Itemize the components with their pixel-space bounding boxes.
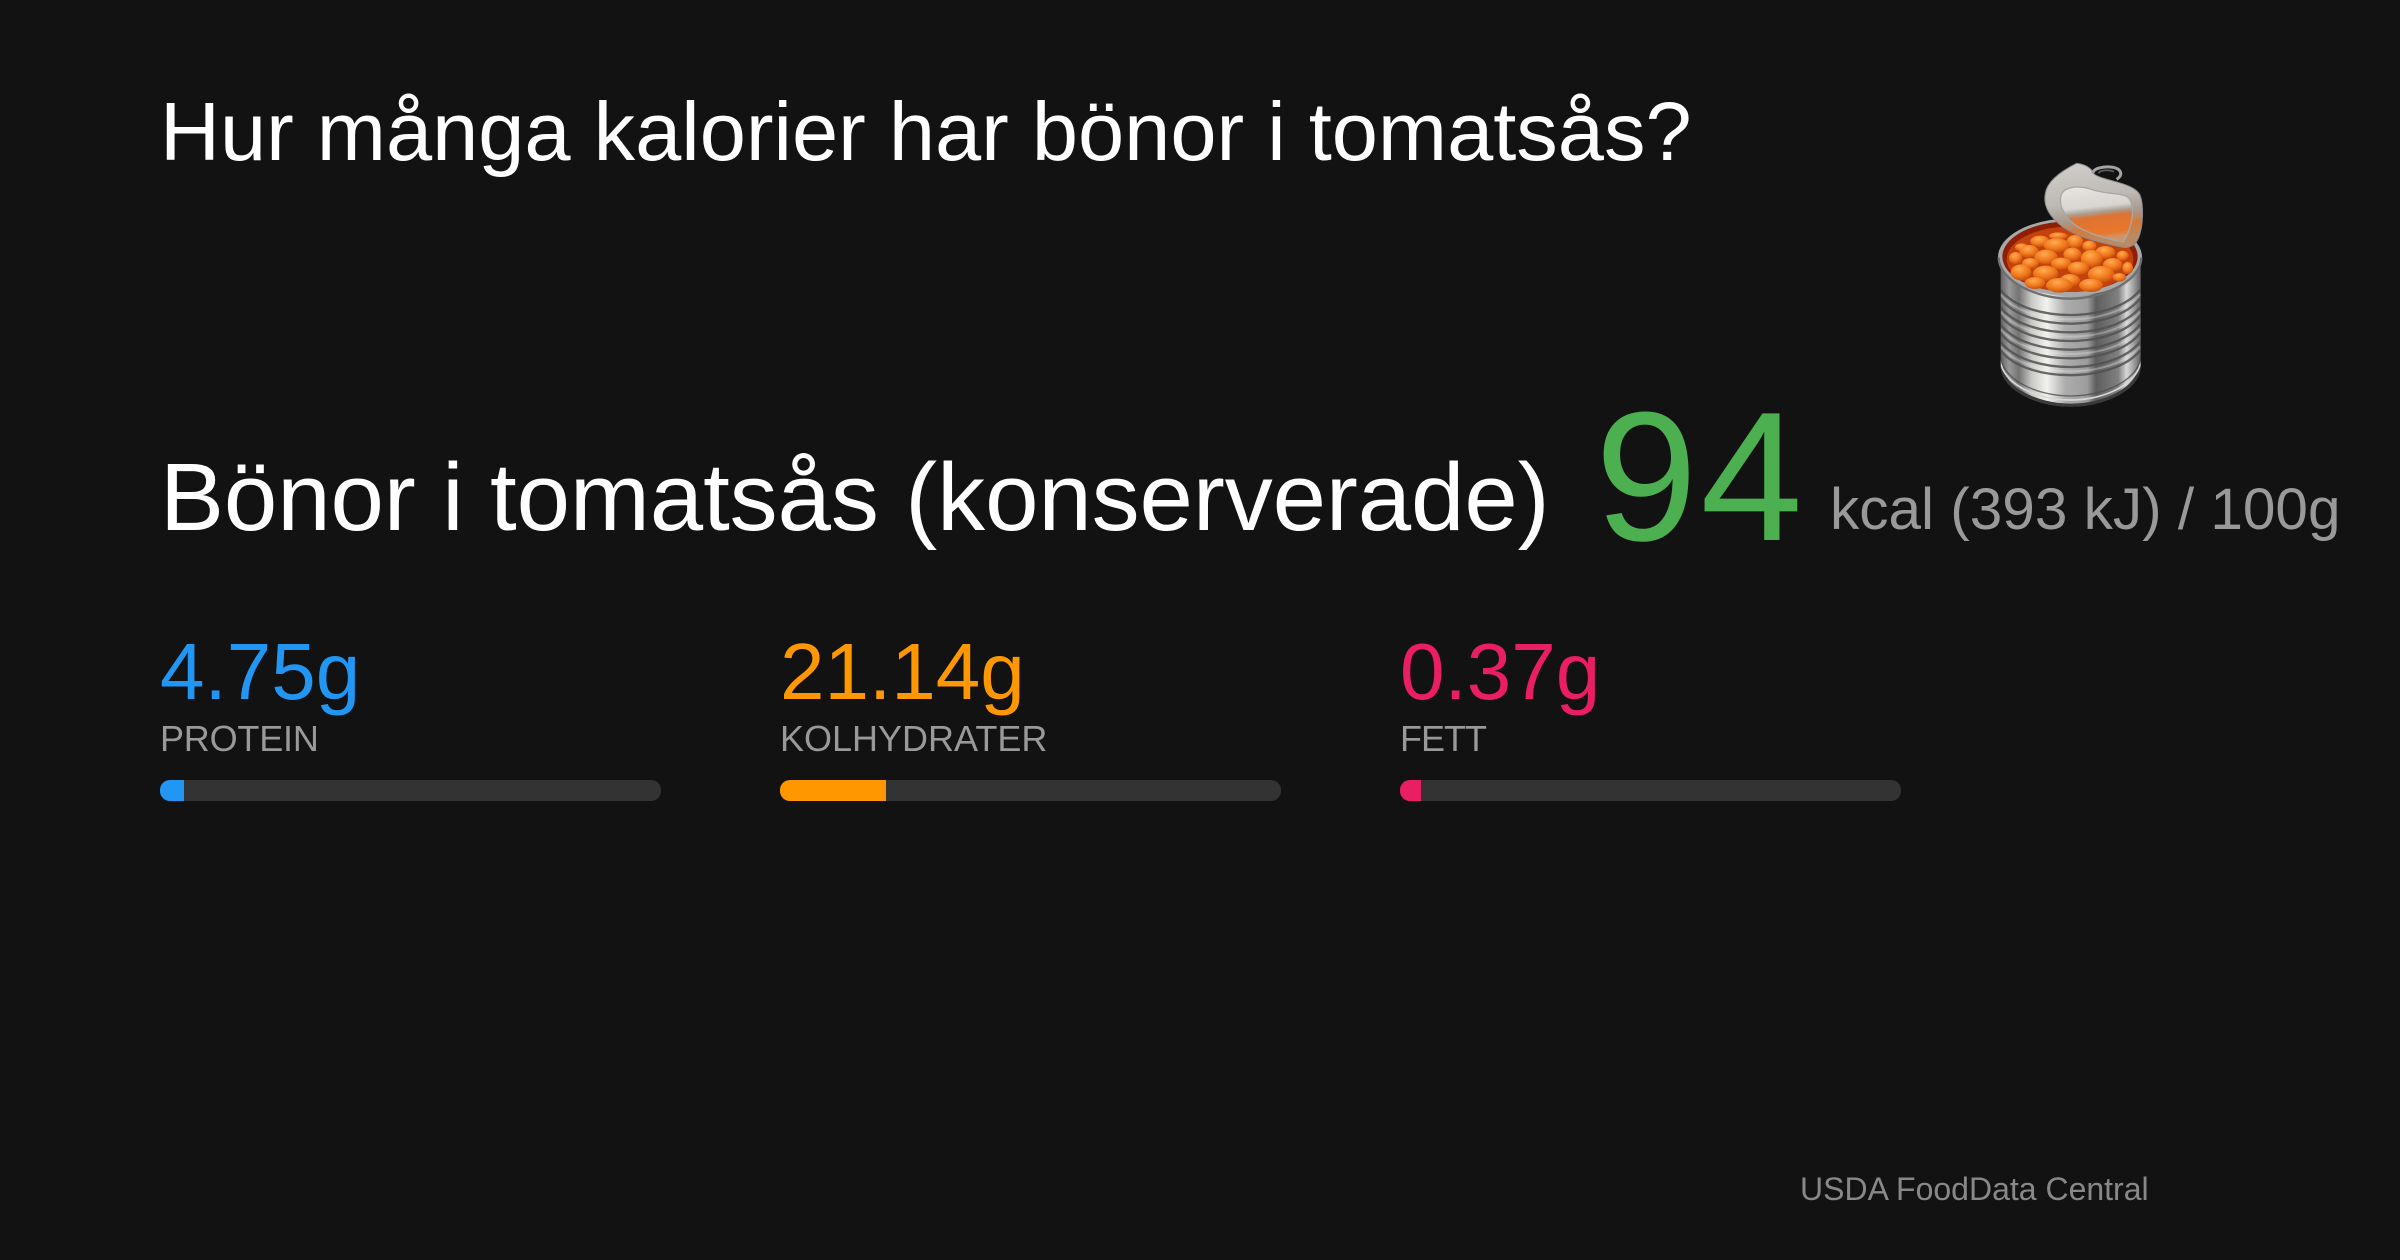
macro: protein	[160, 627, 661, 801]
calorie unit: kcal (393 kJ) / 100g	[1830, 477, 2341, 542]
protein value: 4.75g	[160, 627, 360, 716]
calorie value: 94	[1595, 373, 1806, 579]
food name heading: Bönor i tomatsås (konserverade)	[160, 444, 1550, 551]
carbohydrates label: KOLHYDRATER	[780, 718, 1047, 759]
beans	[2009, 232, 2133, 293]
carbohydrates bar	[780, 780, 1281, 800]
protein bar	[160, 780, 661, 800]
fat value: 0.37g	[1400, 627, 1600, 716]
macro: carbohydrates	[780, 627, 1281, 801]
source footer: USDA FoodData Central	[1800, 1171, 2149, 1207]
fat bar	[1400, 780, 1901, 800]
can rim and sauce	[1998, 219, 2142, 299]
fat label: FETT	[1400, 718, 1486, 759]
macro: fat	[1400, 627, 1901, 801]
carbohydrates value: 21.14g	[780, 627, 1025, 716]
icon: open can of beans in tomato sauce	[1998, 162, 2144, 407]
can body	[2001, 258, 2141, 407]
lid and pull ring	[2045, 163, 2143, 248]
title: Hur många kalorier har bönor i tomatsås?	[160, 85, 1692, 178]
protein label: PROTEIN	[160, 718, 319, 759]
